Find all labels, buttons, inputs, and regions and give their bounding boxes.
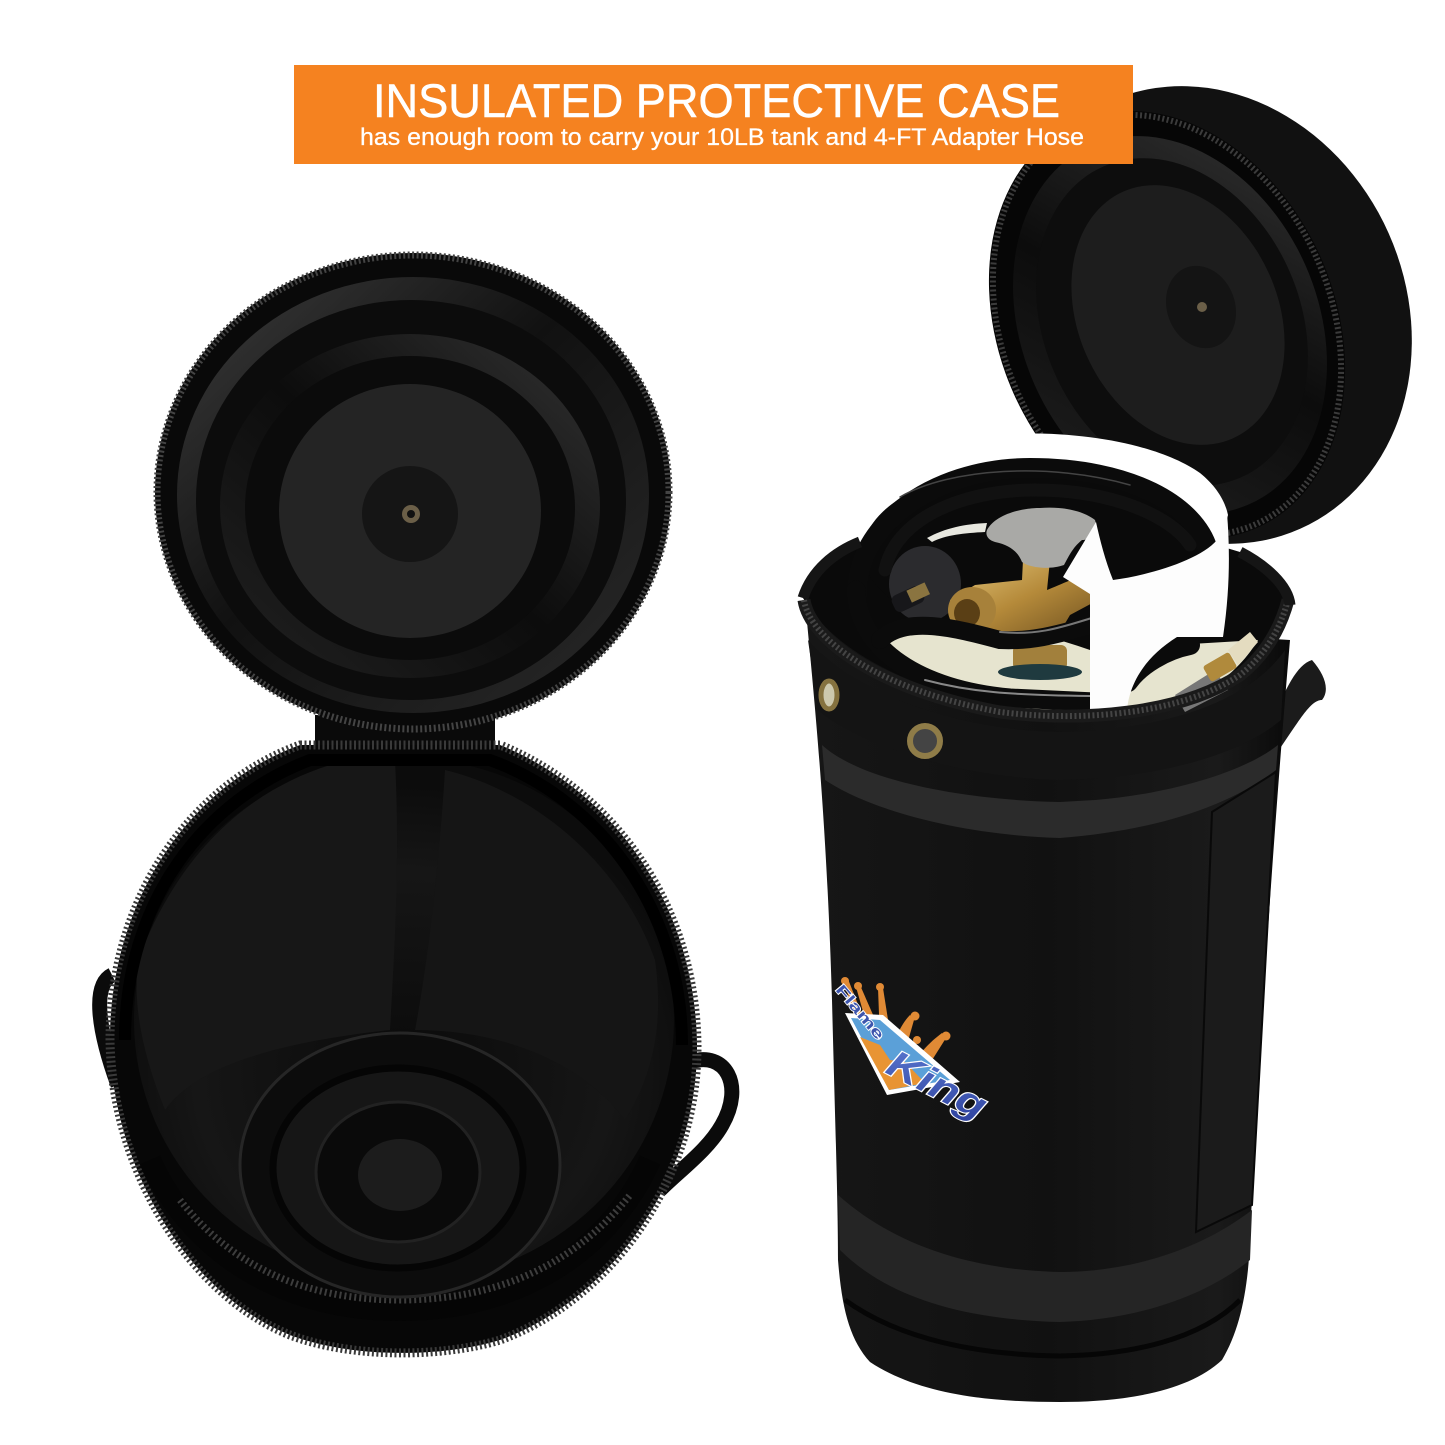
tank shell [870,626,1258,720]
propane tank and hose [855,433,1258,720]
dark tank hollow [863,466,1203,638]
left case: hinge [315,715,495,760]
right case: upper webbing strap [822,745,1278,838]
banner background [294,65,1133,164]
right lid: centre button [1155,256,1247,358]
gauge connector [889,546,961,622]
banner [294,65,1133,164]
hose brass end fitting [1175,632,1258,712]
right closed case with tank [803,19,1445,1402]
logo wordmark: Flame [832,982,887,1043]
crown prongs [841,977,950,1076]
right case: cylinder body [806,610,1290,1402]
grommet two [910,726,940,756]
right case: interior opening [803,510,1290,717]
right case: back rim [803,542,1290,605]
banner subtitle: has enough room to carry your 10LB tank and 4-FT Adapter Hose [360,124,1084,151]
flame king logo [832,977,993,1128]
collar band back [855,433,1228,565]
collar band front [1063,513,1229,714]
right case: side panel [1196,772,1276,1232]
valve handwheel [986,508,1096,568]
crest [845,1013,960,1095]
brass valve [948,560,1098,680]
right case: base edge [845,1300,1240,1356]
right case: front zipper [804,600,1288,716]
left open case [100,253,732,1353]
banner title: INSULATED PROTECTIVE CASE [373,74,1060,127]
right case: hinged lid [923,19,1445,611]
left case: side handle [100,975,732,1190]
right case: carry handle [1268,660,1326,760]
tank top sliver [927,523,987,542]
left case: bottom moulded insert [240,1033,560,1297]
right case: lower webbing strap [838,1195,1252,1322]
coiled adapter hose [856,468,1208,702]
grommet one [821,681,837,709]
left case: open body [110,745,697,1353]
right case: collar fabric [808,640,1285,780]
logo wordmark [832,982,993,1128]
left lid: centre button [362,466,458,562]
left case: open lid [155,253,671,731]
logo wordmark: King [880,1043,993,1128]
